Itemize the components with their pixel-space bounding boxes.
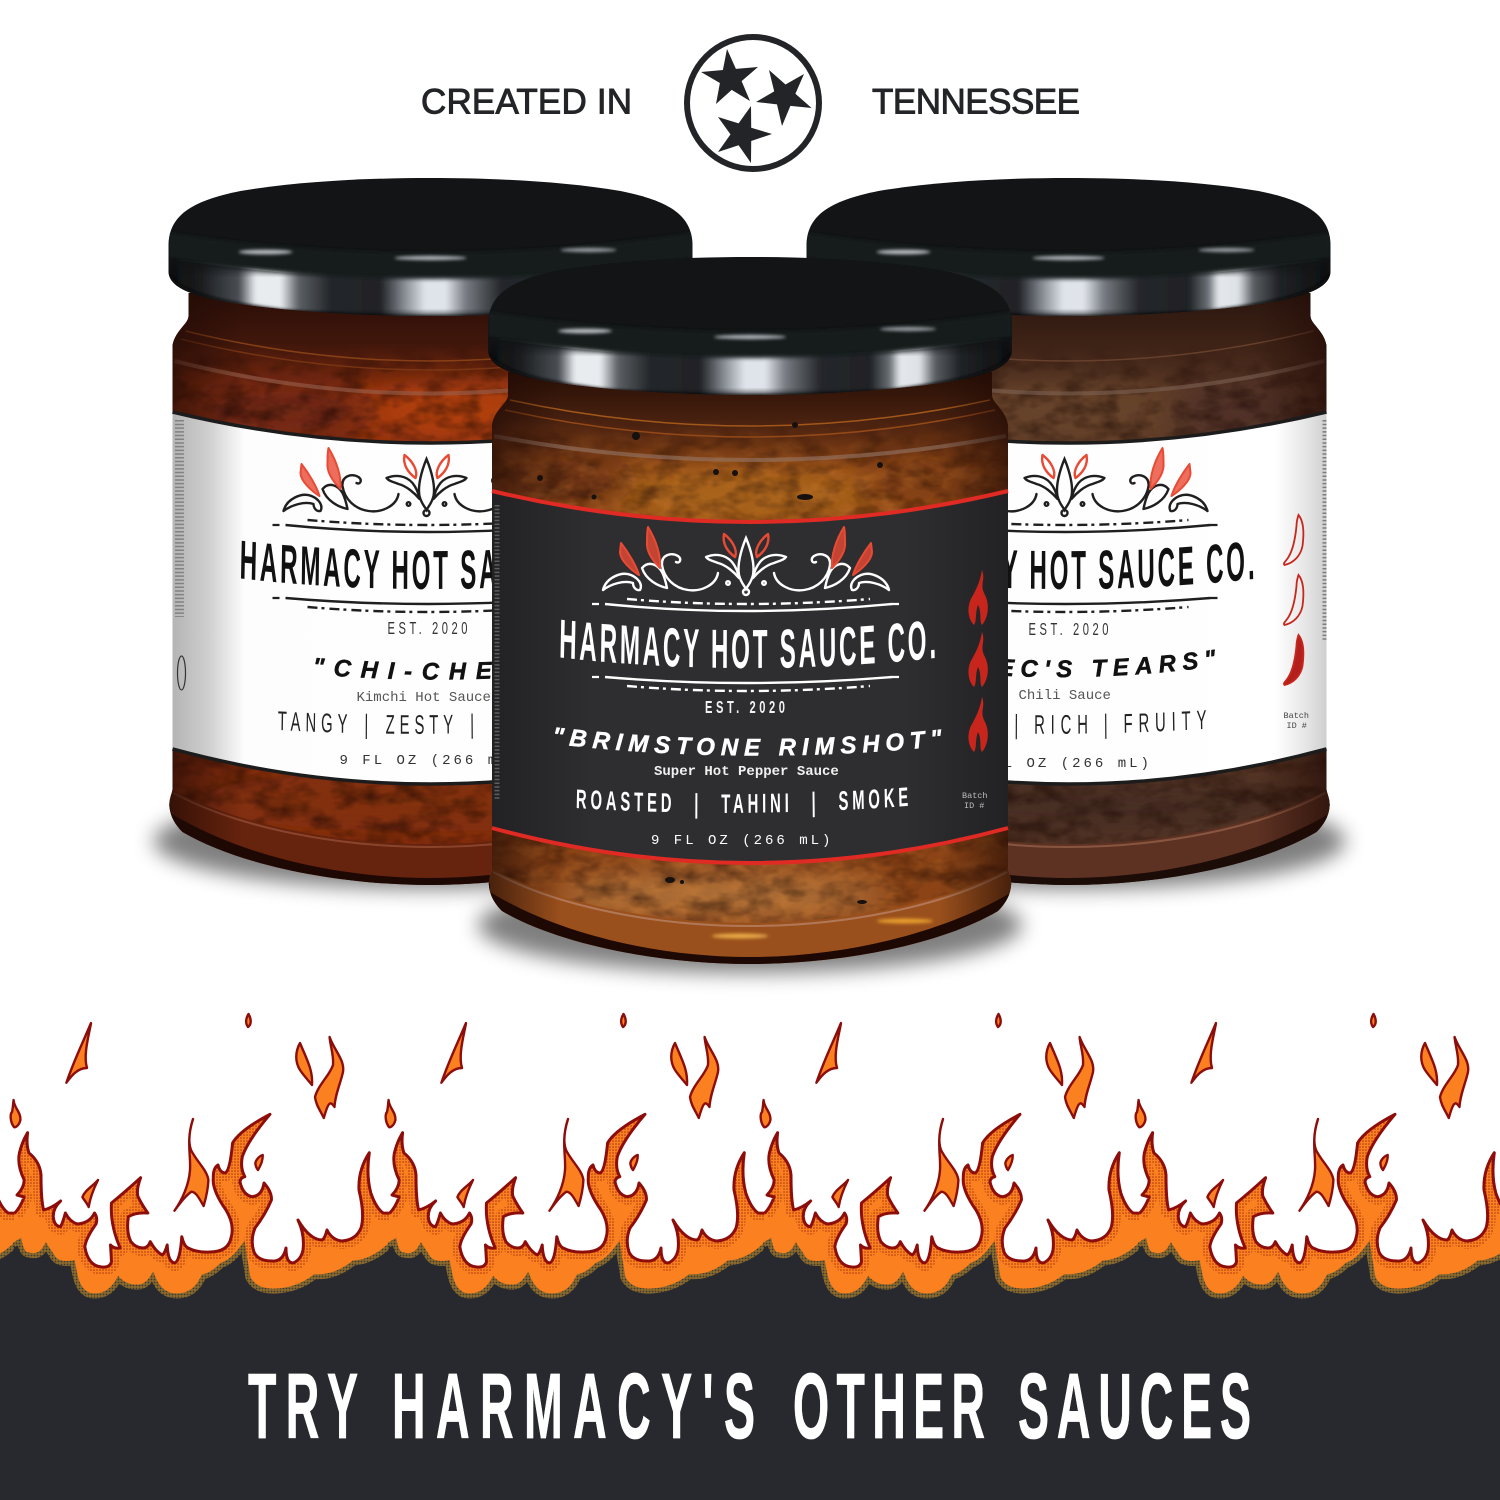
ornament — [922, 448, 1208, 516]
tasting notes: ROASTED | TAHINI | SMOKE — [576, 787, 908, 819]
banner heading: SAUCES — [1018, 1353, 1251, 1458]
label — [810, 412, 1326, 784]
tasting notes: TANGY | ZESTY | SPICY — [278, 711, 473, 739]
fine print column — [1322, 420, 1326, 641]
sauce type: Super Hot Pepper Sauce — [654, 764, 839, 780]
glass body with sauce — [169, 293, 510, 885]
volume: 9 FL OZ (266 mL) — [340, 753, 522, 769]
title row: created in Tennessee — [421, 37, 1080, 169]
rules — [910, 520, 1218, 612]
volume: 9 FL OZ (266 mL) — [651, 833, 833, 849]
lid — [168, 178, 692, 321]
fine print column — [494, 505, 500, 800]
batch id: ID # — [964, 801, 984, 811]
batch id — [962, 791, 988, 811]
glass body with sauce — [990, 293, 1330, 885]
tasting notes: SPICY | RICH | FRUITY — [1016, 710, 1206, 740]
brand name: HARMACY HOT SAUCE CO. — [1008, 542, 1254, 590]
ornament — [603, 527, 889, 595]
icon: Tennessee tri-star emblem — [687, 37, 819, 169]
rules — [272, 520, 580, 612]
sauce specks — [537, 422, 883, 904]
batch id: Batch — [1284, 711, 1309, 721]
label edges — [172, 412, 688, 784]
shadow — [802, 793, 1346, 889]
jar: chili sauce (right) — [806, 178, 1356, 904]
label — [492, 491, 1008, 863]
batch id: ID # — [1286, 721, 1307, 731]
label edges — [810, 412, 1326, 784]
sauce type: Chili Sauce — [1018, 688, 1111, 704]
lid — [806, 178, 1330, 321]
text: created in: CREATED IN — [421, 82, 632, 122]
ornament — [284, 448, 570, 516]
text: Tennessee: TENNESSEE — [872, 82, 1080, 122]
brand name: HARMACY HOT SAUCE CO. — [241, 540, 492, 590]
shadow — [154, 793, 698, 889]
jar: Chi-Chee kimchi hot sauce (left) — [142, 178, 692, 904]
volume: 9 FL OZ (266 mL) — [970, 756, 1152, 772]
sauce name: "BRIMSTONE RIMSHOT" — [554, 727, 942, 756]
banner heading: TRY — [248, 1353, 358, 1458]
label red trims — [492, 491, 1008, 863]
established: EST. 2020 — [1028, 619, 1108, 640]
shadow — [478, 877, 1022, 973]
established: EST. 2020 — [705, 697, 785, 718]
rules — [592, 599, 899, 691]
brand name: HARMACY HOT SAUCE CO. — [560, 620, 935, 668]
flames band — [0, 1014, 1500, 1500]
heat scale chilies — [1284, 515, 1303, 685]
batch id — [1284, 711, 1309, 731]
sauce name: "CHI-CHEE" — [315, 658, 492, 680]
banner heading — [248, 1353, 1251, 1458]
banner heading: HARMACY'S — [392, 1353, 755, 1458]
fine print column — [175, 420, 184, 617]
sauce name: "AZTEC'S TEARS" — [1008, 649, 1215, 678]
banner heading: OTHER — [793, 1353, 985, 1458]
established: EST. 2020 — [388, 618, 467, 639]
icon: mini tri-star emblem — [178, 656, 186, 690]
batch id: Batch — [962, 791, 988, 801]
sauce type: Kimchi Hot Sauce — [356, 690, 491, 706]
heat scale flames — [968, 570, 988, 752]
label — [172, 412, 688, 784]
jar: Brimstone Rimshot (center) — [467, 257, 1033, 988]
glass body with sauce — [480, 370, 1020, 970]
lid — [488, 257, 1012, 400]
